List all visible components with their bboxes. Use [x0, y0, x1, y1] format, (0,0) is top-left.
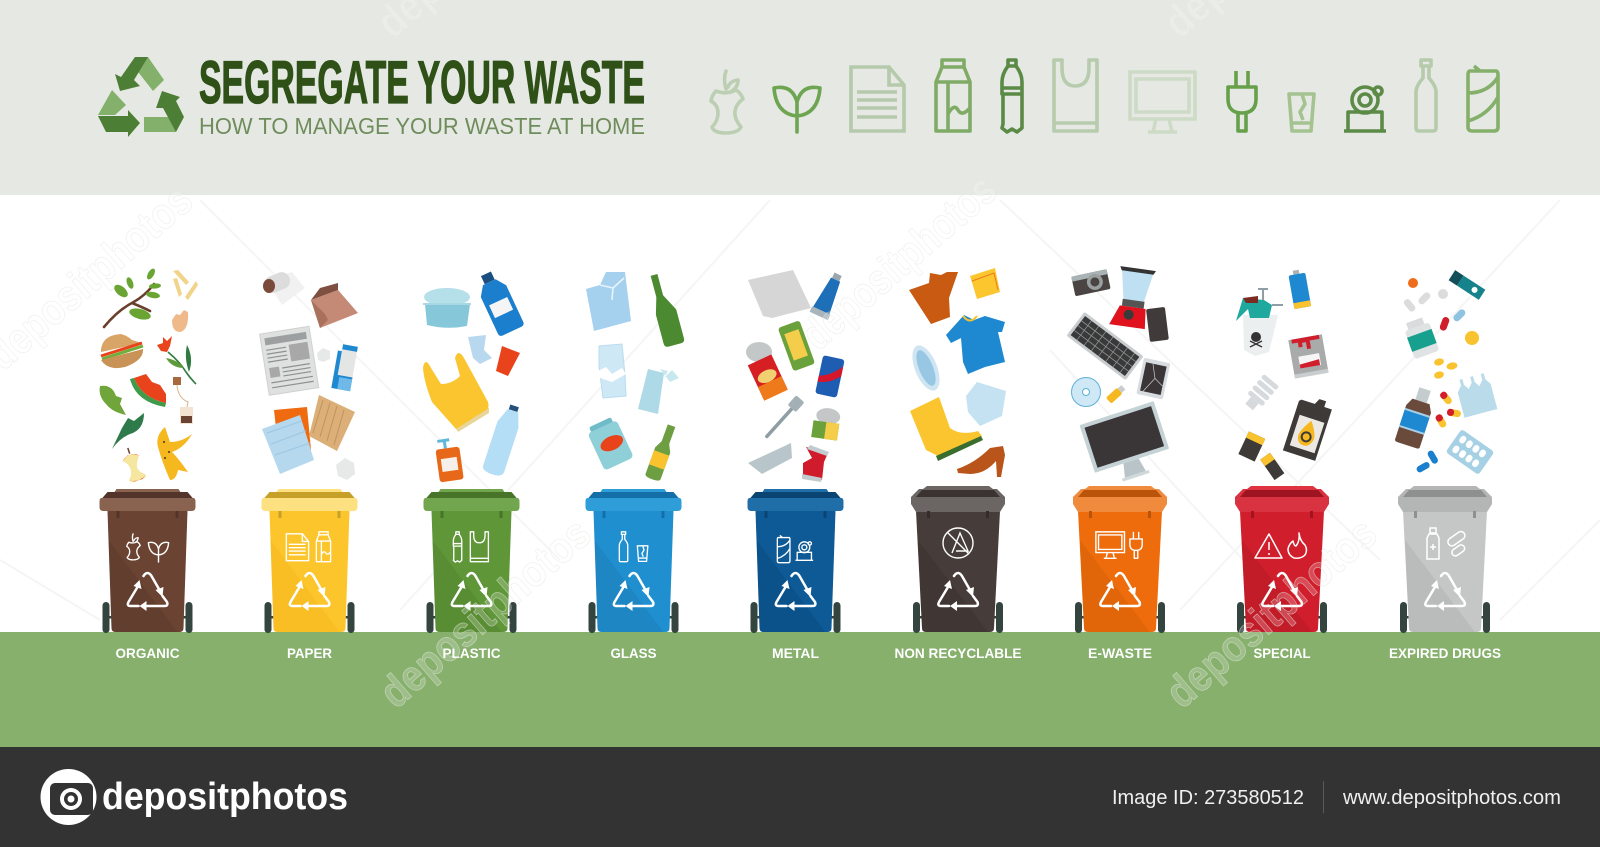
header panel [0, 0, 1600, 195]
battery [1260, 453, 1284, 480]
watermarks: depositphotos [1156, 509, 1386, 718]
broken jar [596, 344, 626, 398]
yellow tablets [1433, 357, 1458, 380]
icon: broken glass [1289, 94, 1314, 131]
food container [423, 288, 471, 328]
smartphone [1146, 307, 1169, 342]
paint can [1288, 334, 1329, 379]
pills [1402, 278, 1479, 345]
icon: plug [1228, 71, 1256, 131]
motor oil jug [1283, 393, 1334, 461]
watermelon [130, 374, 166, 407]
banana peel [157, 427, 192, 480]
CFL light bulb [1241, 374, 1279, 413]
items: glass [585, 272, 685, 482]
ointment tube [1449, 270, 1485, 300]
icon: soda can [1468, 66, 1498, 131]
dark leaf [112, 413, 144, 449]
blue capsules [1415, 449, 1439, 474]
green can [778, 320, 815, 371]
foil sheet [748, 270, 811, 318]
icon: plastic bottle [1002, 60, 1022, 132]
medicine bottle [1402, 316, 1439, 359]
broken glass pane [586, 272, 631, 331]
red and yellow capsules [1434, 390, 1462, 429]
brown shirt [909, 272, 958, 324]
foil tray [748, 443, 792, 474]
ground band [0, 632, 1600, 747]
pasta [173, 270, 198, 300]
items: non recyclable [907, 268, 1006, 477]
blister pack [1446, 429, 1494, 475]
green wine bottle [646, 272, 685, 348]
newspaper [260, 326, 319, 395]
oak leaf [100, 386, 126, 415]
bin labels: PLASTIC [442, 645, 500, 661]
desktop monitor [1079, 401, 1174, 489]
icon: sprout [774, 87, 820, 132]
blue detergent bottle [473, 268, 525, 337]
logo: recycle symbol [98, 57, 184, 137]
blue note sheet [262, 415, 314, 474]
diaper [966, 382, 1006, 426]
pressure sprayer with skull [1236, 289, 1283, 356]
bin: special [1235, 486, 1329, 633]
waste type line icons [711, 60, 1498, 133]
rubber boot [910, 397, 983, 461]
paper roll [262, 270, 305, 305]
items: e-waste [1066, 266, 1174, 489]
bin labels: SPECIAL [1254, 645, 1311, 661]
watermarks [0, 0, 1386, 718]
soap dispenser [434, 439, 464, 482]
icon: apple core [711, 71, 743, 133]
bin: e-waste [1073, 486, 1167, 633]
bin: non recyclable [911, 486, 1005, 633]
keyboard [1066, 312, 1144, 380]
bin labels: NON RECYCLABLE [894, 645, 1022, 661]
crumpled ball [336, 458, 355, 480]
yellow cloth [970, 268, 1000, 299]
sanitary pad [907, 342, 945, 394]
items: metal [746, 270, 847, 482]
items: expired drugs [1394, 270, 1497, 475]
icon: milk carton [936, 60, 970, 131]
watermarks: depositphotos [370, 509, 600, 718]
icon: plastic bag [1054, 60, 1097, 131]
orange sheet [274, 407, 311, 455]
crumpled ball [317, 348, 330, 362]
website url: www.depositphotos.com [1342, 787, 1561, 809]
crushed can [802, 445, 829, 482]
bin labels: E-WASTE [1088, 645, 1152, 661]
spray can [1288, 269, 1311, 309]
red cup [496, 346, 520, 376]
icon: monitor [1130, 72, 1195, 132]
beer bottle [645, 423, 679, 482]
image id: Image ID: 273580512 [1112, 787, 1304, 809]
jar with red label [585, 415, 634, 471]
bin: metal [748, 489, 844, 633]
watermarks: depositphotos [792, 165, 1006, 360]
cardboard box [311, 283, 358, 328]
subtitle: HOW TO MANAGE YOUR WASTE AT HOME [199, 113, 645, 139]
bin labels: PAPER [287, 645, 332, 661]
title: SEGREGATE YOUR WASTE [199, 49, 645, 116]
bin: paper [262, 489, 358, 633]
red tin with lid [746, 342, 788, 401]
camera [1071, 269, 1111, 296]
blue t-shirt [946, 315, 1005, 374]
toothpaste tube [810, 270, 847, 320]
icon: document [851, 67, 904, 131]
items: plastic [423, 268, 525, 482]
kraft bag [309, 395, 355, 451]
footer bar [0, 747, 1600, 847]
fork [761, 395, 804, 441]
soda can [815, 355, 845, 398]
icon: wine bottle [1416, 60, 1436, 131]
blender [1109, 266, 1156, 330]
items: paper [260, 270, 358, 480]
crumpled cup [468, 335, 492, 364]
high heel shoe [957, 446, 1005, 477]
bin: plastic [424, 489, 520, 633]
milk carton [331, 344, 358, 391]
clear bottle [481, 402, 525, 478]
bin: glass [586, 489, 682, 633]
battery [1238, 431, 1265, 462]
icon: tin can [1344, 87, 1386, 131]
branch [104, 267, 161, 327]
footer logo [40, 769, 348, 825]
bin labels: EXPIRED DRUGS [1389, 645, 1501, 661]
USB stick [1106, 384, 1126, 404]
ampoules [1455, 372, 1497, 418]
broken tablet [1136, 358, 1170, 399]
bin labels [116, 645, 1501, 661]
items: special [1236, 269, 1334, 480]
yellow plastic bag [423, 353, 489, 432]
bin: organic [100, 489, 196, 633]
flower [157, 336, 196, 384]
apple core [119, 445, 147, 483]
footer logo: depositphotos [102, 776, 348, 818]
egg shell [172, 310, 188, 332]
burger [101, 334, 143, 368]
small tin [811, 406, 841, 441]
CD [1072, 378, 1100, 406]
bin labels: GLASS [610, 645, 656, 661]
brown syrup bottle [1394, 385, 1437, 449]
broken drinking glass [638, 369, 679, 414]
items: organic [100, 267, 198, 483]
faint diagonal watermark lines [0, 0, 1600, 620]
bin labels: ORGANIC [116, 645, 180, 661]
tea bag [173, 377, 193, 424]
bin: expired drugs [1398, 486, 1492, 633]
bin labels: METAL [772, 645, 819, 661]
